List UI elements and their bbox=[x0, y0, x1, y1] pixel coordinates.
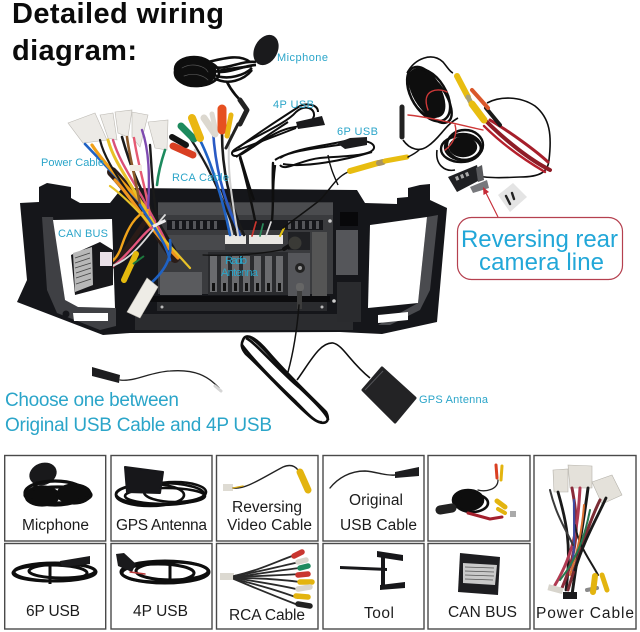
part: GPS antenna: GPS Antenna bbox=[116, 517, 207, 534]
head unit frame bbox=[17, 183, 447, 335]
diagram labels: RCA Cable bbox=[172, 172, 229, 184]
part: reversing video cable bbox=[216, 456, 318, 541]
power wires bbox=[550, 488, 606, 595]
note: choose one USB: Choose one between bbox=[5, 390, 179, 411]
left window bbox=[53, 219, 115, 308]
part: reversing video cable: Reversing bbox=[232, 499, 302, 516]
thick red and black power lead bbox=[472, 90, 550, 172]
coil highlight bbox=[182, 65, 208, 80]
power cable harness bbox=[68, 110, 190, 318]
callout: reversing rear camera line: camera line bbox=[479, 249, 604, 276]
bottom rail bbox=[135, 219, 353, 330]
diagram labels: Radio bbox=[225, 255, 247, 267]
diagram labels: Micphone bbox=[277, 52, 328, 64]
yellow RCA plug on harness bbox=[124, 254, 136, 280]
diagram labels: Antenna bbox=[221, 267, 259, 279]
part: RCA cable bbox=[216, 544, 318, 629]
4P USB bbox=[232, 104, 325, 200]
part: original USB cable bbox=[323, 456, 424, 541]
top band bbox=[158, 203, 333, 215]
6P USB bbox=[273, 137, 374, 200]
diagram labels: Power Cable bbox=[41, 157, 104, 169]
left slot bbox=[73, 313, 108, 321]
thin red wires bbox=[408, 90, 483, 150]
parts grid bbox=[5, 456, 636, 629]
part: 4P USB: 4P USB bbox=[133, 603, 188, 620]
center plate bbox=[158, 202, 333, 294]
wires into back connectors bbox=[240, 158, 284, 236]
white connectors on back bbox=[225, 235, 283, 244]
diagram labels: 6P USB bbox=[337, 126, 378, 138]
part: tool bbox=[323, 544, 424, 629]
right side bracket bbox=[336, 212, 361, 322]
vent row bbox=[167, 220, 323, 230]
part: rear camera cable kit bbox=[428, 456, 530, 541]
center bay bbox=[160, 232, 327, 297]
diagram labels: CAN BUS bbox=[58, 228, 108, 240]
diagram labels: 4P USB bbox=[273, 99, 314, 111]
title: diagram: bbox=[12, 35, 137, 67]
yellow RCA pair bbox=[457, 76, 484, 120]
cable to GPS through port bbox=[288, 283, 304, 372]
reversing rear camera kit bbox=[399, 57, 550, 212]
GPS puck bbox=[363, 368, 415, 422]
GPS coil bbox=[242, 336, 370, 423]
part: 6P USB bbox=[5, 544, 106, 629]
wires bbox=[85, 130, 190, 284]
right window bbox=[368, 217, 427, 308]
microphone bbox=[175, 30, 284, 148]
part: reversing video cable: Video Cable bbox=[227, 517, 312, 534]
diagram labels bbox=[41, 52, 489, 406]
left window trim bbox=[42, 217, 116, 330]
part: 6P USB: 6P USB bbox=[26, 603, 80, 620]
bottom white connector bbox=[127, 278, 158, 318]
camera coils bbox=[399, 57, 550, 178]
red arrow to camera bbox=[483, 187, 498, 217]
mic coil bbox=[175, 57, 256, 104]
reversing video link with yellow RCA bbox=[283, 150, 419, 228]
screw bag bbox=[498, 183, 527, 212]
part: original USB cable: Original bbox=[349, 492, 403, 509]
part: GPS antenna bbox=[111, 456, 212, 541]
title bbox=[12, 0, 224, 67]
part: microphone bbox=[5, 456, 106, 541]
mic plug bbox=[240, 100, 247, 124]
right slot bbox=[378, 312, 408, 323]
connectors bbox=[68, 110, 168, 150]
RCA cable bbox=[172, 109, 244, 235]
original USB cable bbox=[92, 367, 221, 391]
wire ties bbox=[130, 165, 142, 171]
part: power cable bbox=[534, 456, 636, 629]
note: choose one USB bbox=[5, 390, 272, 436]
note: choose one USB: Original USB Cable and 4P USB bbox=[5, 415, 272, 436]
plugs bbox=[172, 109, 231, 155]
part: original USB cable: USB Cable bbox=[340, 517, 417, 534]
GPS antenna bbox=[242, 336, 415, 423]
rear camera bbox=[448, 165, 480, 192]
part: CAN BUS: CAN BUS bbox=[448, 604, 517, 621]
part: microphone: Micphone bbox=[22, 517, 89, 534]
wires bbox=[190, 130, 244, 235]
mic head bbox=[248, 30, 284, 70]
part: 4P USB bbox=[111, 544, 212, 629]
wire bundle backing bbox=[112, 172, 175, 258]
radio antenna plug bbox=[203, 236, 302, 255]
right window trim bbox=[378, 215, 438, 325]
box label bbox=[73, 247, 93, 292]
part: tool: Tool bbox=[364, 605, 394, 622]
part: CAN BUS bbox=[428, 544, 530, 629]
part: RCA cable: RCA Cable bbox=[229, 607, 305, 624]
diagram labels: GPS Antenna bbox=[419, 394, 489, 406]
frame body bbox=[17, 183, 447, 335]
part: power cable: Power Cable bbox=[536, 605, 634, 622]
can bus box bbox=[71, 242, 113, 295]
callout: reversing rear camera line bbox=[458, 218, 622, 280]
inline fuse bbox=[400, 107, 404, 137]
callout: reversing rear camera line: Reversing rear bbox=[461, 226, 618, 253]
